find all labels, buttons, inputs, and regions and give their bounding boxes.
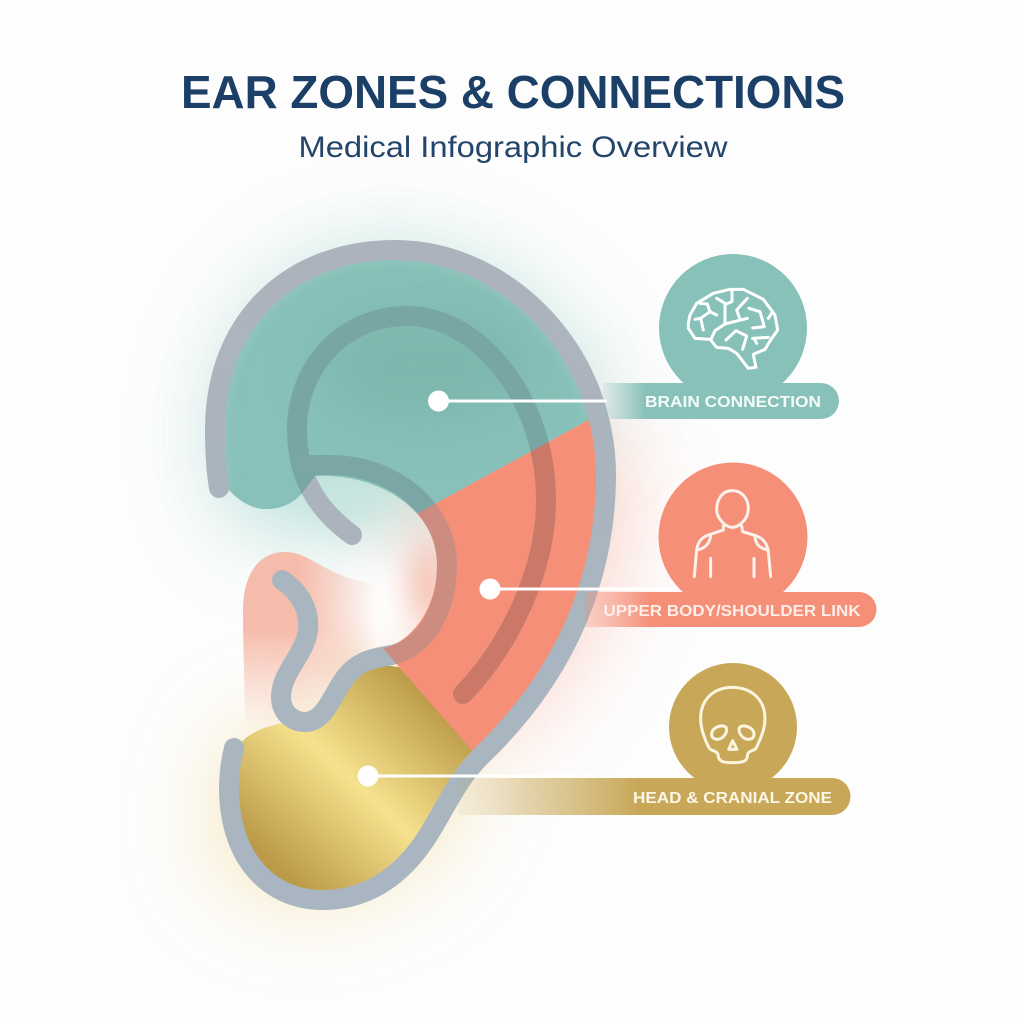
leader line: head — [358, 766, 593, 786]
callout: upper body — [585, 462, 877, 627]
label: upper body: UPPER BODY/SHOULDER LINK — [604, 603, 861, 620]
label band: head — [458, 778, 850, 815]
title: EAR ZONES & CONNECTIONS — [181, 66, 845, 118]
icon: brain — [688, 289, 778, 368]
leader line: brain — [428, 390, 607, 412]
zone: earlobe gold — [229, 663, 480, 900]
callout: head and cranial — [458, 663, 850, 815]
glow: coloured halos — [215, 258, 625, 905]
icon: shoulders — [694, 491, 771, 577]
leader line: upper body — [480, 578, 676, 600]
badge circle: upper body — [658, 462, 808, 612]
label: head and cranial: HEAD & CRANIAL ZONE — [633, 790, 832, 807]
outer helix outline — [215, 250, 606, 900]
icon: skull — [701, 687, 765, 763]
label: brain connection: BRAIN CONNECTION — [645, 394, 821, 411]
concha and tragus line — [281, 465, 447, 722]
callout: brain connection — [603, 254, 839, 419]
label band: upper body — [585, 592, 877, 627]
inner antihelix arc — [297, 316, 546, 694]
zone: tragus pink — [243, 552, 370, 714]
badge circle: brain — [659, 254, 807, 402]
badge circle: skull — [669, 663, 797, 791]
zone: coral middle ear — [383, 415, 606, 757]
zone: teal upper ear — [225, 260, 589, 514]
subtitle: Medical Infographic Overview — [298, 131, 728, 164]
ear illustration — [200, 240, 620, 900]
label band: brain — [603, 383, 839, 419]
